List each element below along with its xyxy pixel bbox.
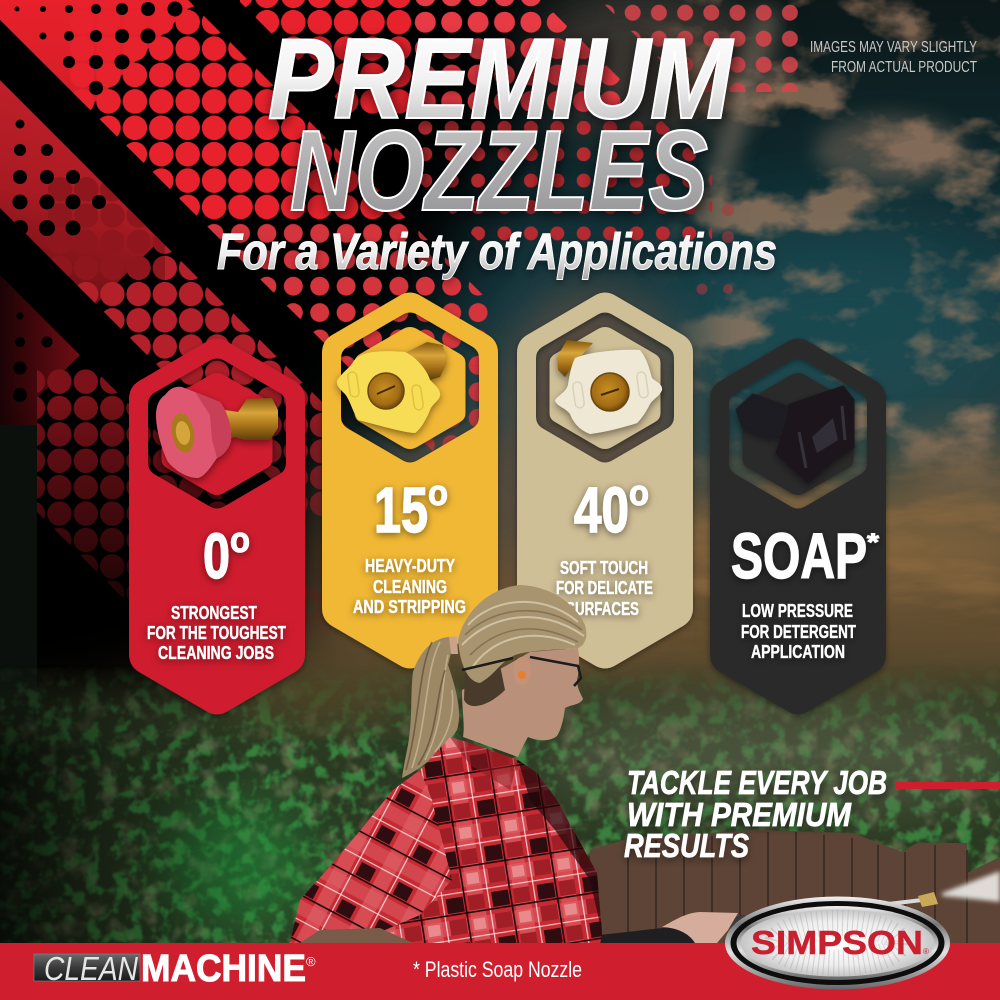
panel: soap nozzle [710, 338, 886, 714]
description: soft touch [556, 558, 653, 619]
description: strongest [147, 603, 286, 663]
label: soap: * [867, 529, 880, 556]
logo: clean machine: MACHINE [141, 948, 306, 990]
panel: 15 degree nozzle [322, 292, 498, 668]
description: strongest: FOR THE TOUGHEST [147, 623, 286, 643]
footnote: * Plastic Soap Nozzle [413, 957, 582, 982]
angle: 40 degrees: 40 [574, 474, 629, 546]
panel: 0 degree nozzle [129, 338, 305, 714]
forearm [300, 928, 413, 943]
bottom red band [0, 943, 1000, 1000]
tan hexagon card [517, 292, 693, 668]
woman in plaid shirt [290, 585, 602, 945]
angle: 0 degrees: o [230, 519, 250, 560]
angle: 0 degrees: 0 [203, 520, 230, 592]
label: soap: SOAP [731, 520, 867, 592]
faint stray dots [696, 204, 734, 294]
fence [590, 830, 1000, 945]
description: soft touch: SOFT TOUCH [560, 558, 648, 578]
disclaimer note [810, 39, 977, 76]
description: low pressure: LOW PRESSURE [742, 601, 853, 621]
logo: clean machine: ® [306, 954, 316, 969]
top right dot group [604, 4, 798, 92]
logo: simpson: SIMPSON [751, 924, 923, 961]
red hexagon card [129, 338, 305, 714]
pressure washer wand and gun [532, 892, 938, 945]
ear with earplug [513, 657, 531, 685]
woman's hand [662, 912, 738, 943]
tagline red rule [895, 782, 1000, 789]
shirt [290, 737, 602, 945]
angle: 15 degrees: o [428, 472, 448, 513]
yellow hexagon card [322, 292, 498, 668]
panel: 40 degree nozzle [517, 292, 693, 668]
description: soft touch: FOR DELICATE [556, 578, 653, 598]
logo: clean machine: CLEAN [44, 950, 138, 987]
upper right dot group [240, 0, 712, 247]
title: premium nozzles: NOZZLES [290, 108, 708, 235]
subtitle: For a Variety of Applications [217, 223, 777, 280]
icon: white nozzle [555, 340, 662, 434]
description: heavy-duty: HEAVY-DUTY [365, 556, 455, 576]
description: low pressure: FOR DETERGENT [741, 622, 856, 642]
description: low pressure: APPLICATION [751, 642, 845, 662]
upper diagonal band with dots [0, 0, 488, 451]
halftone red dots and diagonal stripes [0, 0, 798, 616]
description: strongest: STRONGEST [171, 603, 257, 623]
description: strongest: CLEANING JOBS [158, 643, 274, 663]
icon: yellow nozzle [337, 342, 447, 433]
description: soft touch: SURFACES [566, 599, 639, 619]
hair tie [449, 636, 458, 654]
angle: 15 degrees: 15 [374, 474, 428, 546]
title: premium nozzles [268, 16, 734, 235]
description: heavy-duty [353, 556, 466, 617]
tagline: WITH PREMIUM [627, 796, 852, 833]
logo: simpson: ® [923, 947, 929, 956]
charcoal hexagon card [710, 338, 886, 714]
description: heavy-duty: AND STRIPPING [353, 597, 466, 617]
icon: red nozzle [156, 387, 278, 478]
angle: 40 degrees: o [629, 472, 649, 513]
spray water jet [942, 871, 1000, 902]
tagline: RESULTS [624, 827, 749, 864]
safety glasses [462, 657, 581, 686]
neck and face [462, 648, 583, 757]
ponytail [402, 637, 459, 778]
tagline [624, 764, 887, 864]
description: heavy-duty: CLEANING [373, 577, 447, 597]
description: low pressure [741, 601, 856, 662]
icon: black nozzle [737, 387, 853, 482]
head of hair [458, 585, 586, 683]
logo: clean machine [34, 948, 316, 990]
logo: simpson [725, 896, 950, 990]
middle diagonal band with dots [0, 80, 350, 516]
tagline: TACKLE EVERY JOB [627, 764, 887, 801]
title: premium nozzles: PREMIUM [268, 16, 734, 143]
lower diagonal band fading out [0, 276, 322, 616]
